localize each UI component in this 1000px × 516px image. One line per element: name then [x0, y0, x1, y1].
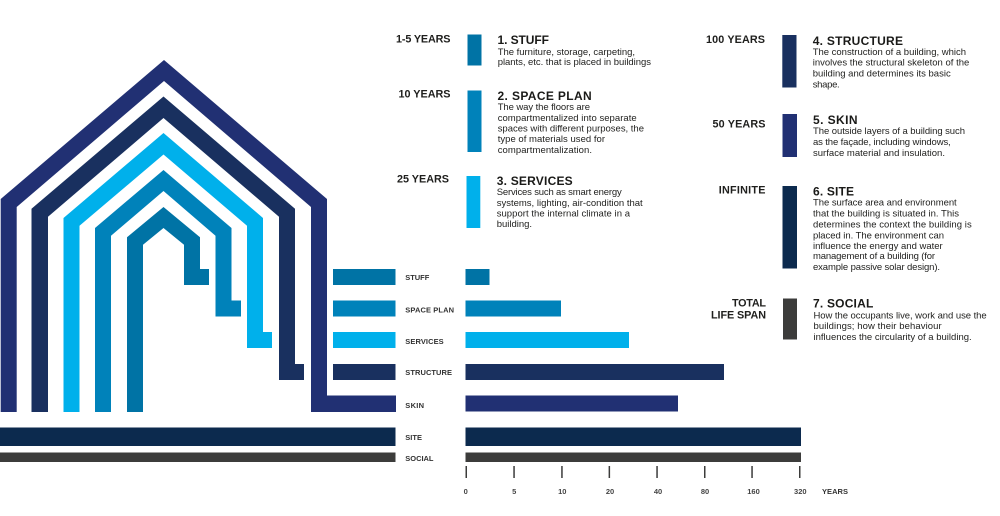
- description: [814, 310, 987, 343]
- span label: 25 YEARS: [397, 174, 449, 186]
- house layer: space plan: [95, 170, 241, 412]
- description: determines the context the building is: [813, 219, 972, 230]
- description: type of materials used for: [498, 134, 605, 145]
- label: space plan: SPACE PLAN: [405, 305, 454, 314]
- left bar: space plan: [333, 300, 396, 316]
- heading: 3. SERVICES: [497, 174, 573, 188]
- description: The construction of a building, which: [813, 47, 966, 58]
- bar: social: [466, 452, 801, 462]
- axis numbers: 40: [654, 487, 662, 496]
- left bar: stuff: [333, 269, 396, 285]
- legend item: social: [711, 297, 987, 343]
- span label: INFINITE: [719, 185, 766, 197]
- span label: 50 YEARS: [712, 119, 766, 131]
- label: skin: SKIN: [405, 401, 424, 410]
- colour key: [468, 34, 482, 66]
- description: surface material and insulation.: [813, 148, 945, 159]
- description: The way the floors are: [498, 102, 590, 113]
- span label: 100 YEARS: [706, 34, 765, 46]
- bar chart: life span in years: [466, 269, 801, 462]
- axis numbers: 20: [606, 487, 614, 496]
- description: How the occupants live, work and use the: [814, 310, 987, 321]
- legend item: site: [719, 185, 972, 273]
- house layer: structure: [32, 96, 304, 412]
- description: Services such as smart energy: [497, 187, 622, 198]
- house layer: services: [64, 133, 272, 412]
- label: structure: STRUCTURE: [405, 368, 452, 377]
- description: influence the energy and water: [813, 241, 943, 252]
- label: social: SOCIAL: [405, 454, 434, 463]
- heading: 6. SITE: [813, 185, 854, 199]
- left bars extending from the house: [0, 269, 396, 462]
- description: as the façade, including windows,: [813, 137, 951, 148]
- house layer: stuff: [127, 207, 209, 412]
- colour key: [782, 35, 796, 88]
- axis numbers: 80: [701, 487, 709, 496]
- bar: space plan: [466, 300, 561, 316]
- axis numbers: 10: [558, 487, 566, 496]
- heading: 7. SOCIAL: [813, 297, 873, 311]
- left bar: site: [0, 428, 396, 446]
- axis unit: YEARS: [822, 487, 848, 496]
- span label: 10 YEARS: [398, 89, 450, 101]
- legend item: skin: [712, 113, 965, 159]
- colour key: [782, 114, 797, 157]
- left bar: services: [333, 332, 396, 348]
- axis numbers: 5: [512, 487, 516, 496]
- description: example passive solar design).: [813, 262, 940, 273]
- description: placed in. The environment can: [813, 230, 944, 241]
- colour key: [782, 186, 797, 268]
- bar: stuff: [466, 269, 490, 285]
- span label: [711, 298, 766, 321]
- span label: TOTAL: [732, 298, 766, 310]
- house layer: skin: [1, 60, 396, 412]
- label: stuff: STUFF: [405, 273, 430, 282]
- description: The surface area and environment: [813, 198, 957, 209]
- legend item: space plan: [398, 89, 644, 156]
- colour key: [466, 176, 480, 228]
- legend item: services: [397, 174, 643, 230]
- description: spaces with different purposes, the: [498, 124, 644, 135]
- description: compartmentalization.: [498, 145, 592, 156]
- label: services: SERVICES: [405, 337, 444, 346]
- description: The outside layers of a building such: [813, 126, 965, 137]
- heading: 2. SPACE PLAN: [498, 89, 592, 103]
- description: [498, 47, 651, 68]
- description: support the internal climate in a: [497, 208, 631, 220]
- chart row labels: [405, 273, 454, 463]
- span label: 1-5 YEARS: [396, 34, 450, 46]
- span label: LIFE SPAN: [711, 309, 766, 321]
- description: involves the structural skeleton of the: [813, 58, 969, 69]
- axis numbers: 0: [464, 487, 468, 496]
- description: compartmentalized into separate: [498, 113, 637, 124]
- description: [813, 47, 969, 90]
- left bar: social: [0, 452, 396, 462]
- heading: 5. SKIN: [813, 113, 858, 127]
- description: systems, lighting, air-condition that: [497, 198, 643, 209]
- axis numbers: [464, 487, 807, 496]
- description: [813, 126, 965, 159]
- bar: skin: [466, 396, 678, 412]
- colour key: [468, 90, 482, 152]
- icon: nested house outline: [1, 60, 396, 412]
- bar: services: [466, 332, 629, 348]
- axis: logarithmic years scale: [464, 466, 848, 496]
- legend item: structure: [706, 34, 969, 90]
- axis numbers: 320: [794, 487, 807, 496]
- axis ticks: [466, 466, 800, 478]
- legend item: stuff: [396, 33, 651, 68]
- description: The furniture, storage, carpeting,: [498, 47, 635, 58]
- axis numbers: 160: [747, 487, 760, 496]
- label: site: SITE: [405, 433, 422, 442]
- colour key: [783, 298, 797, 340]
- bar: site: [466, 428, 801, 446]
- description: [497, 187, 643, 230]
- bar: structure: [466, 364, 724, 380]
- description: building and determines its basic: [813, 69, 951, 80]
- description: influences the circularity of a building.: [814, 332, 972, 343]
- description: plants, etc. that is placed in buildings: [498, 57, 651, 68]
- heading: 1. STUFF: [498, 33, 549, 47]
- description: [813, 198, 972, 273]
- description: [498, 102, 644, 156]
- left bar: structure: [333, 364, 396, 380]
- description: shape.: [813, 79, 840, 90]
- description: buildings; how their behaviour: [814, 321, 942, 332]
- heading: 4. STRUCTURE: [813, 34, 903, 48]
- description: building.: [497, 219, 532, 230]
- description: that the building is situated in. This: [813, 209, 959, 220]
- description: management of a building (for: [813, 251, 935, 262]
